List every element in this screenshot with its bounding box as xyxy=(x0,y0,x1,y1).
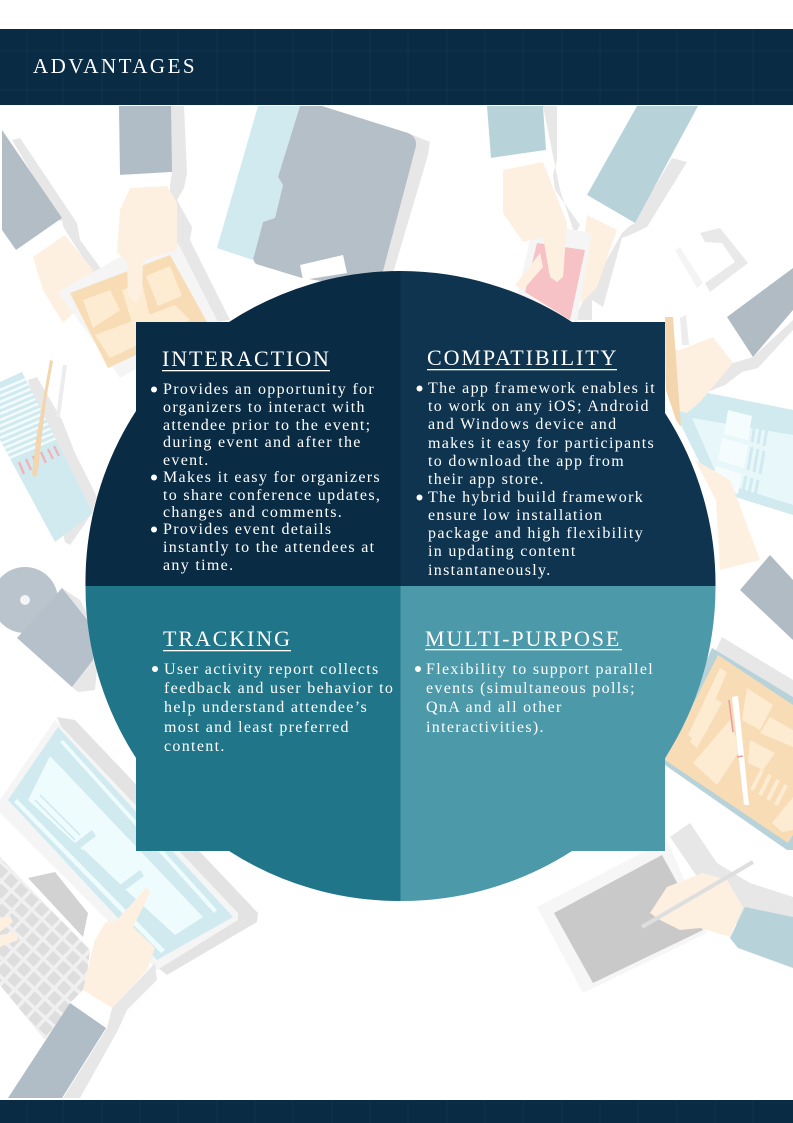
text: compatibility bullets: and Windows device and xyxy=(428,416,617,433)
panel: multi-purpose xyxy=(400,586,716,901)
illustration: folder xyxy=(217,106,430,290)
text: multi-purpose bullet xyxy=(415,661,654,736)
illustration: top-left hand on tablet xyxy=(2,106,230,378)
illustration: bottom-left tablet, laptop and hand xyxy=(0,717,258,1098)
text: compatibility bullets: to download the app from xyxy=(428,453,625,470)
text: interaction bullets: attendee prior to the event; xyxy=(163,417,371,434)
illustration: notepad and pencil xyxy=(0,356,97,545)
text: interaction bullets: Provides event details xyxy=(163,521,332,538)
text: multi-purpose bullet: interactivities). xyxy=(426,719,545,736)
illustration: right hand with pencil and document xyxy=(665,268,793,640)
text: compatibility bullets: package and high flexibility xyxy=(428,525,644,542)
header band xyxy=(0,29,793,105)
illustration: paper clip shape xyxy=(675,228,748,292)
heading: interaction: INTERACTION xyxy=(162,346,331,371)
panel: compatibility xyxy=(400,271,716,586)
text: tracking bullet xyxy=(152,661,394,755)
text: tracking bullet: most and least preferred xyxy=(164,719,350,736)
text: interaction bullets: changes and comments. xyxy=(163,504,343,521)
heading: tracking: TRACKING xyxy=(163,626,292,651)
panel: tracking xyxy=(85,586,401,901)
text: compatibility bullets: The hybrid build framework xyxy=(428,489,644,506)
text: compatibility bullets: ensure low installation xyxy=(428,507,603,524)
footer band xyxy=(0,1100,793,1123)
panel: interaction xyxy=(85,271,400,586)
text: compatibility bullets: to work on any iOS; Android xyxy=(428,398,650,415)
text: tracking bullet: help understand attendee’s xyxy=(164,699,368,716)
text: compatibility bullets: in updating content xyxy=(428,543,577,560)
text: interaction bullets: instantly to the attendees at xyxy=(163,539,375,556)
text: tracking bullet: content. xyxy=(164,738,226,755)
text: compatibility bullets: makes it easy for participants xyxy=(428,435,655,452)
title: ADVANTAGES xyxy=(33,54,197,78)
illustration: orange notebook and pen xyxy=(662,637,793,850)
text: compatibility bullets: their app store. xyxy=(428,471,545,488)
text: tracking bullet: User activity report collects xyxy=(164,661,380,678)
text: multi-purpose bullet: Flexibility to support parallel xyxy=(426,661,654,678)
illustration: top-centre hands with phone xyxy=(487,106,698,322)
illustration: bottom-right tablet and writing hand xyxy=(537,823,793,993)
illustration: CD and case xyxy=(0,567,100,692)
text: interaction bullets: Provides an opportunity for xyxy=(163,381,375,398)
text: tracking bullet: feedback and user behavior to xyxy=(164,680,394,697)
text: interaction bullets: event. xyxy=(163,452,210,469)
text: compatibility bullets xyxy=(416,380,656,579)
text: interaction bullets: to share conference updates, xyxy=(163,487,381,504)
text: interaction bullets: during event and after the xyxy=(163,434,362,451)
text: multi-purpose bullet: events (simultaneous polls; xyxy=(426,680,636,697)
text: interaction bullets: Makes it easy for organizers xyxy=(163,469,381,486)
heading: compatibility: COMPATIBILITY xyxy=(427,345,618,370)
text: interaction bullets: any time. xyxy=(163,557,234,574)
heading: multi-purpose: MULTI-PURPOSE xyxy=(425,626,621,651)
text: interaction bullets xyxy=(151,381,381,574)
text: compatibility bullets: The app framework enables it xyxy=(428,380,656,397)
text: compatibility bullets: instantaneously. xyxy=(428,562,552,579)
text: interaction bullets: organizers to interact with xyxy=(163,399,366,416)
text: multi-purpose bullet: QnA and all other xyxy=(426,699,563,716)
